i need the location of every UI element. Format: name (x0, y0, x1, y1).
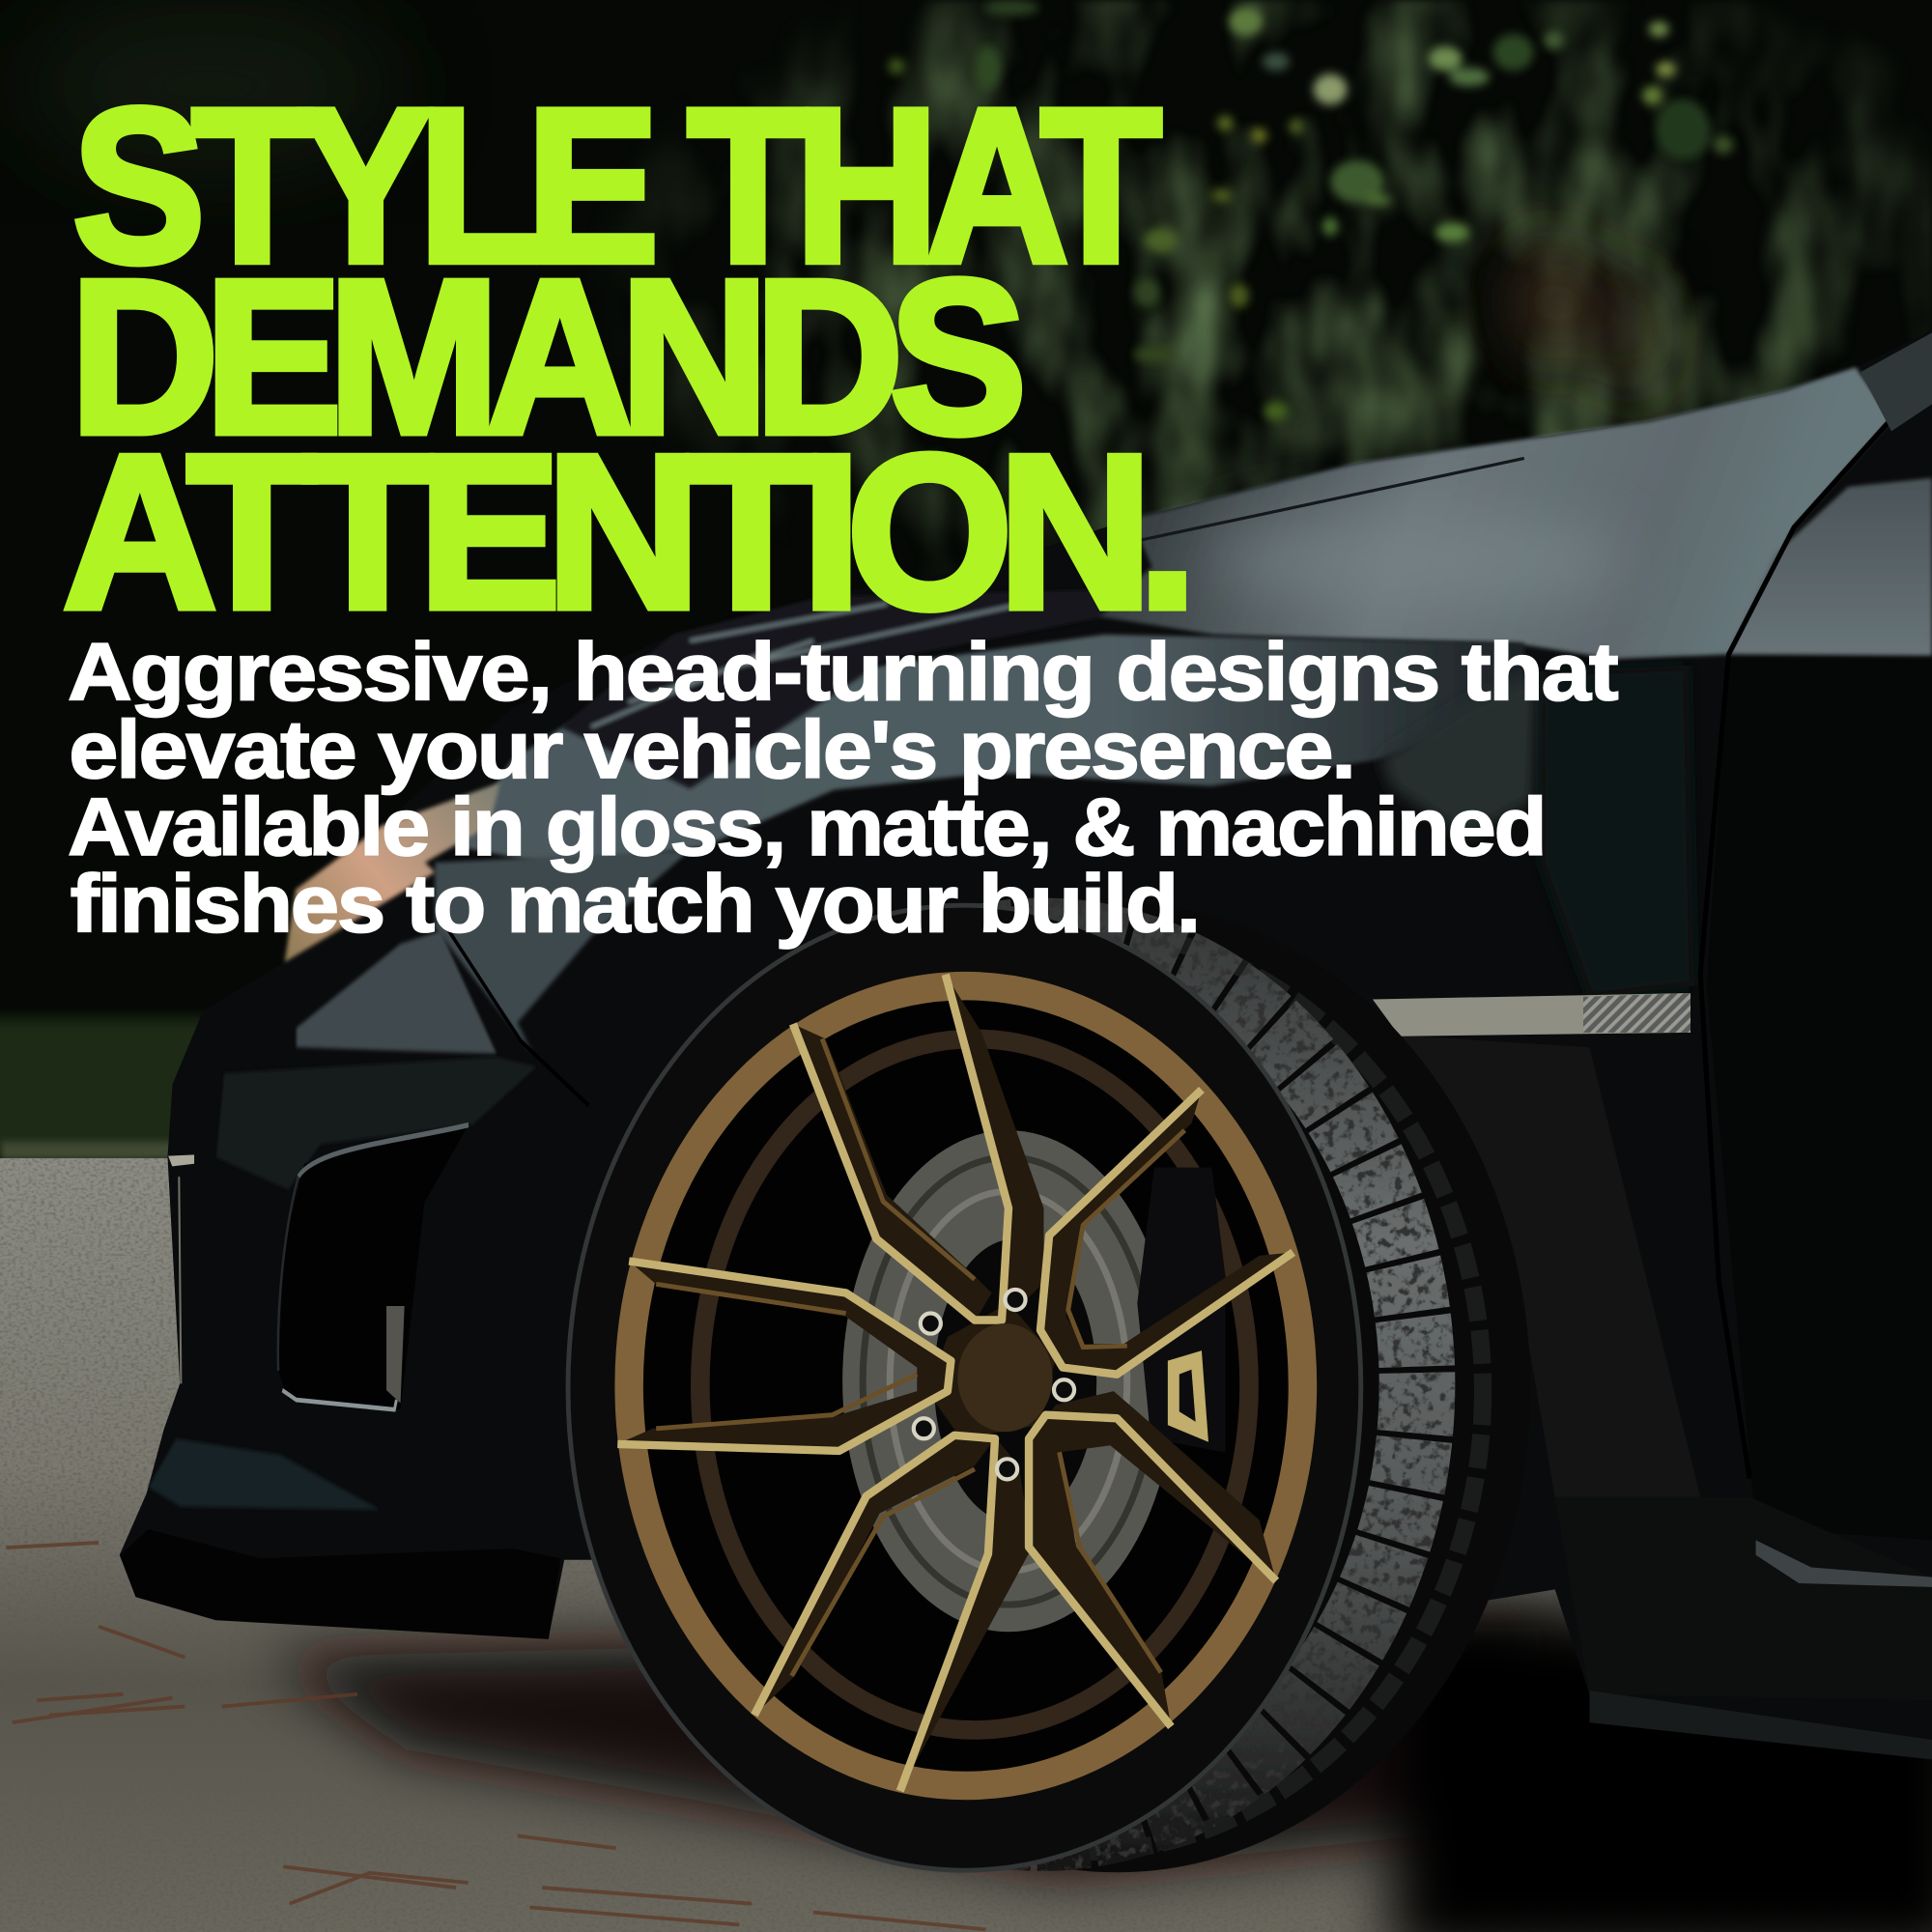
car body (120, 330, 1932, 1759)
headlight (285, 782, 500, 962)
body silhouette (120, 330, 1932, 1756)
tire tread (980, 898, 1492, 1871)
front splitter (120, 1529, 560, 1639)
side sill (1589, 1690, 1932, 1759)
bumper edge highlight (179, 1177, 181, 1383)
side marker (168, 1154, 194, 1166)
body line 2: elevate your vehicle's presence. (69, 704, 1354, 795)
rim inner ring (700, 1038, 1249, 1730)
bumper panels (120, 918, 588, 1639)
rim barrel (629, 986, 1302, 1785)
hood crease (1131, 458, 1524, 542)
spoke bronze fillets (656, 1038, 1184, 1676)
foliage highlights (889, 0, 1733, 420)
fender crease (440, 918, 588, 1105)
body line 3: Available in gloss, matte, & machined (68, 781, 1545, 872)
bumper gloss (216, 1057, 536, 1190)
grass (0, 1018, 210, 1161)
body copy (68, 626, 1617, 949)
gravel ground (0, 1158, 1932, 1932)
brown undergrowth (1508, 241, 1664, 401)
ground shadow (271, 1627, 1540, 1873)
brake rotor (842, 1130, 1175, 1632)
right shadow (1392, 1614, 1932, 1932)
vertical body reflections (1540, 666, 1694, 998)
lower hood panel (435, 850, 690, 1054)
spoke bodies (617, 975, 1293, 1791)
chrome fender strip (1373, 993, 1690, 1037)
grille vent (278, 1125, 469, 1409)
fender lower panel (1392, 1035, 1700, 1497)
hood highlight (1208, 511, 1627, 610)
glossy reflection streak (560, 589, 1136, 788)
pine needles (6, 1543, 985, 1929)
headline line 3: ATTENTION. (63, 410, 1183, 655)
hood reflection (457, 635, 1524, 867)
forest (0, 0, 1932, 579)
upper door panel (1729, 478, 1932, 656)
spoke machined faces (617, 975, 1293, 1791)
tire back (703, 903, 1530, 1872)
tree reflection (1380, 671, 1540, 838)
hood panel (1096, 367, 1891, 659)
door seam (1700, 419, 1891, 1479)
rear mud flap (1555, 1497, 1932, 1700)
door sill highlight (1756, 1540, 1932, 1587)
bumper top sheen (297, 931, 497, 1054)
mirror (1861, 332, 1932, 431)
body line 4: finishes to match your build. (71, 858, 1199, 949)
lower lip gloss (148, 1438, 381, 1510)
wheel (568, 903, 1530, 1872)
door lower (1707, 657, 1932, 1540)
headline (63, 63, 1183, 655)
body line 1: Aggressive, head-turning designs that (68, 626, 1617, 717)
brake caliper (1137, 1168, 1225, 1452)
lug nuts (914, 1290, 1074, 1479)
headline line 1: STYLE THAT (72, 63, 1160, 308)
headline line 2: DEMANDS (71, 235, 1019, 480)
center hub (957, 1323, 1053, 1432)
tire sidewall (568, 905, 1361, 1870)
